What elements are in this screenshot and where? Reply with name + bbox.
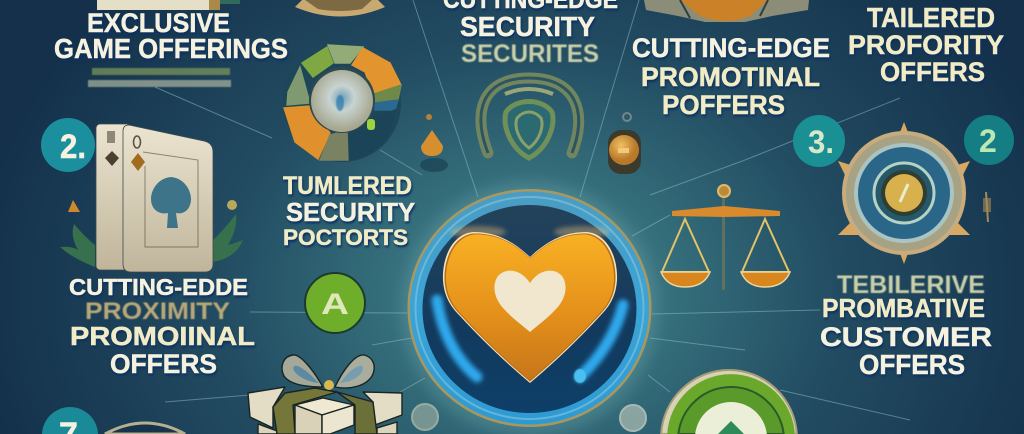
badge: number 2 left (41, 118, 95, 172)
heading line 3: SECURITES (461, 40, 599, 68)
icon: small coin right (620, 405, 646, 431)
heading line 2: SECURITY (286, 197, 415, 227)
heading line 3: CUSTOMER (820, 322, 992, 352)
foliage (60, 214, 243, 267)
badge: number 7 (42, 407, 98, 434)
beam (672, 206, 780, 217)
back card (96, 124, 130, 270)
text block: promotive customer offers (820, 271, 992, 380)
heading: EXCLUSIVE (87, 8, 230, 38)
icon: green button: A (321, 288, 349, 321)
icon: green button (305, 273, 365, 333)
icon: small amber bell left (420, 114, 448, 172)
icon: green poker chip (661, 370, 797, 434)
suit marks (105, 151, 119, 166)
box front left face (295, 405, 322, 434)
text block: tailered priority offers (848, 2, 1004, 87)
heading line 3: PROMOIINAL (70, 321, 255, 351)
flower (68, 200, 80, 212)
heading line 2: PROXIMITY (85, 298, 230, 325)
heading: CUTTING-EDGE (632, 33, 830, 63)
heading line 3: POCTORTS (283, 225, 408, 250)
heart face (446, 234, 614, 380)
text block: cutting-edge proximity promotional offers (69, 274, 255, 379)
connector lines (155, 0, 910, 420)
lower body (258, 422, 397, 434)
badge: number 3: 3. (808, 124, 834, 160)
icon: top card fragment (97, 0, 240, 10)
badge: number 2 right: 2 (979, 123, 997, 159)
icon: scales (661, 185, 790, 290)
small illegible caption (88, 68, 231, 87)
outer ring (408, 189, 652, 427)
inner white heart (494, 271, 566, 332)
text block: cutting-edge promotional offers (632, 33, 830, 120)
gold bud (227, 200, 237, 210)
bow left loop (282, 355, 323, 387)
heading: CUTTING-EDDE (69, 274, 248, 300)
heading line 3: POFFERS (662, 90, 785, 120)
knob (718, 185, 730, 197)
text block: cutting-edge security (443, 0, 618, 68)
heading line 4: OFFERS (859, 349, 965, 380)
lid right (363, 392, 402, 425)
icon: gift box (248, 355, 402, 434)
heading line 4: OFFERS (110, 349, 217, 379)
ribbon right (337, 392, 377, 434)
decorative small tower right of dial (983, 192, 991, 222)
icon: partial ring bottom left (105, 423, 185, 434)
front card (123, 125, 213, 272)
badge: number 3 (793, 115, 845, 167)
heading line 2: SECURITY (460, 11, 595, 42)
left pan (662, 219, 709, 272)
icon: compass dial (838, 122, 970, 264)
badge: number 2 left: 2. (60, 128, 86, 166)
spade (151, 177, 191, 228)
bow right loop (335, 355, 374, 388)
text block: tumlered security poctorts (283, 172, 415, 250)
central heart emblem (402, 182, 658, 434)
ribbon left (273, 388, 337, 434)
box top face (295, 398, 354, 415)
icon: top shirt emblem (644, 0, 809, 22)
heart rim (443, 232, 617, 383)
lid left (248, 387, 285, 428)
icon: top pedestal (295, 0, 385, 16)
heading: TAILERED (867, 2, 995, 33)
blue glow arcs (437, 300, 477, 377)
heading line 2: PROMBATIVE (822, 293, 985, 323)
heading line 3: OFFERS (880, 57, 985, 87)
heading: TUMLERED (283, 172, 412, 200)
ring glow (402, 182, 658, 434)
heading line 2: PROFORITY (848, 30, 1004, 60)
heading: TEBILERIVE (837, 271, 985, 299)
icon: segmented wheel (283, 44, 401, 162)
bow knot (324, 380, 334, 390)
icon: horseshoe shield (481, 78, 579, 158)
heading line 2: GAME OFFERINGS (54, 33, 288, 64)
heading line 2: PROMOTINAL (641, 62, 820, 92)
post (722, 195, 725, 290)
icon: playing cards (60, 124, 243, 272)
text block: exclusive game offerings (54, 8, 288, 87)
icon: small coin left (412, 404, 438, 430)
icon: amber bell right (608, 113, 641, 174)
box front right face (322, 405, 354, 434)
badge: number 2 right (964, 115, 1014, 165)
heart lower bevel (444, 233, 616, 382)
right pan (742, 219, 789, 272)
ring highlight (416, 197, 644, 419)
top heart glow (450, 226, 506, 238)
